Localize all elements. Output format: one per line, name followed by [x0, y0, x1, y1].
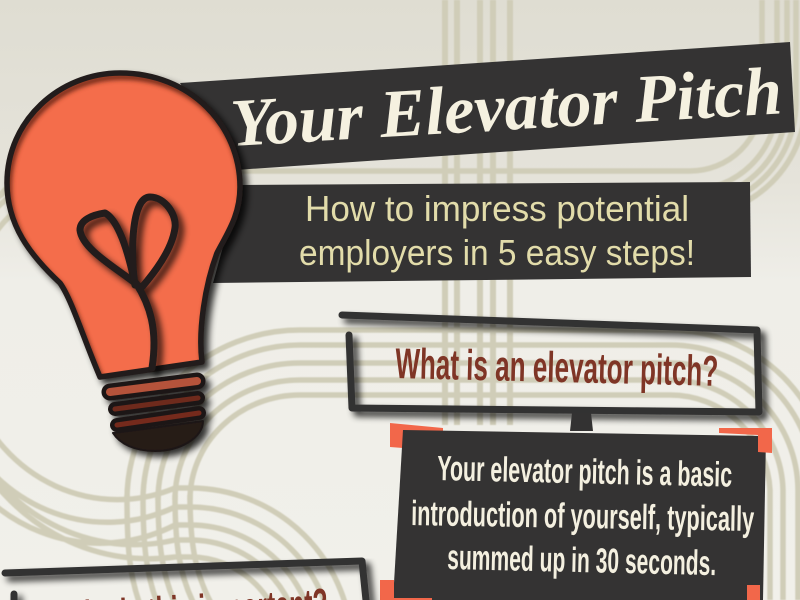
orange corner bottom left — [380, 580, 432, 600]
subtitle banner — [213, 182, 751, 283]
bulb screw base — [110, 381, 203, 451]
title: Your Elevator Pitch — [228, 52, 784, 161]
orange corner top right — [719, 428, 772, 453]
orange corner bottom right — [747, 585, 760, 600]
heading frame — [342, 315, 759, 412]
title banner — [180, 42, 795, 170]
callout: what is an elevator pitch heading — [342, 315, 759, 412]
subtitle: How to impress potential — [305, 188, 689, 229]
heading frame — [5, 561, 367, 600]
bulb glass — [7, 73, 242, 381]
subtitle: employers in 5 easy steps! — [299, 232, 695, 273]
orange corner top left — [390, 423, 443, 448]
icon: light bulb — [7, 73, 242, 451]
callout: why is this important heading — [5, 561, 367, 600]
definition text — [411, 449, 755, 583]
panel: definition — [380, 423, 772, 600]
connector — [570, 413, 593, 431]
bulb filament — [80, 197, 175, 368]
